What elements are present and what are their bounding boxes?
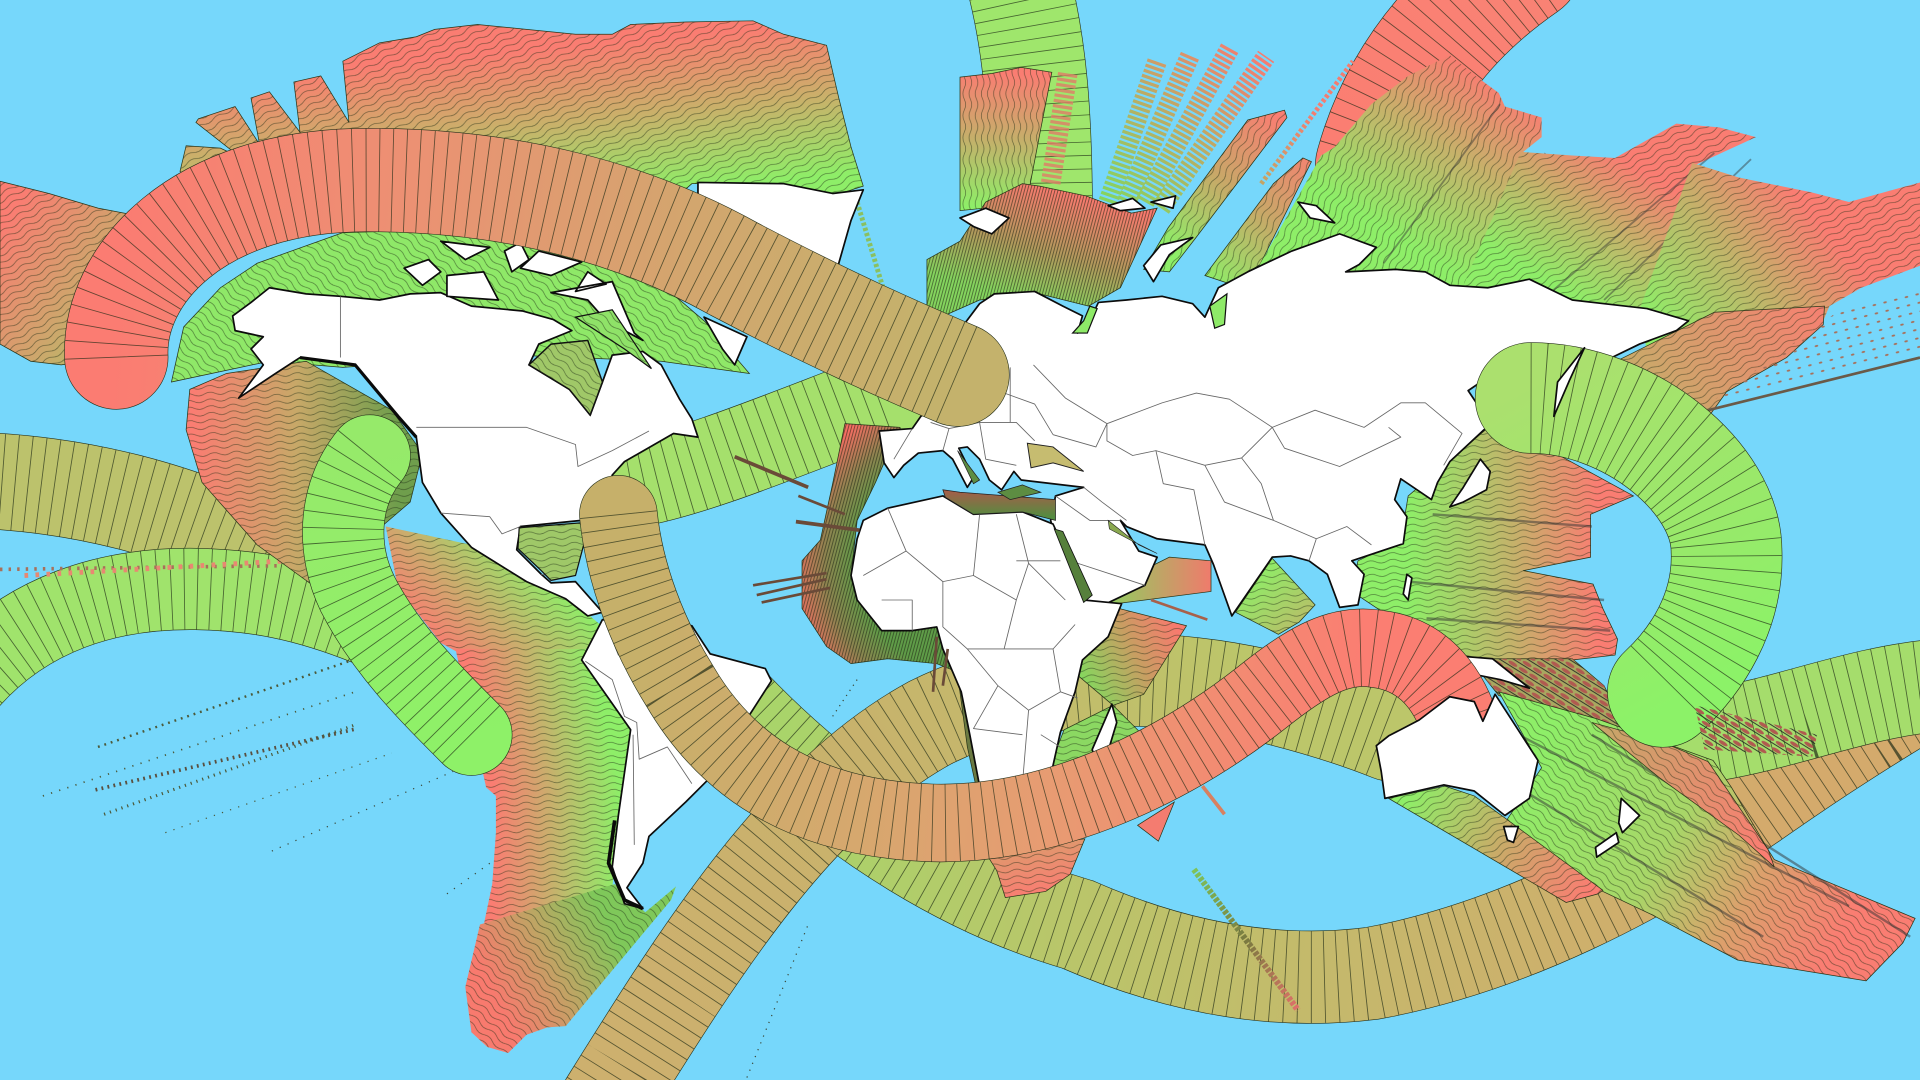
- fan: dark crescent around West Africa: [802, 424, 967, 676]
- water: Mediterranean dark strip: [943, 490, 1056, 520]
- strip: isolated arrow-like strand in the southern ocean: [1194, 869, 1298, 1010]
- land: Sakhalin: [1554, 348, 1584, 416]
- land: Madagascar: [1092, 704, 1117, 765]
- fan: Pacific extrusion off Chile: [480, 795, 624, 943]
- ribbon: green band from the top edge: [1020, 0, 1041, 227]
- fan: extrusion south of Australia: [1389, 786, 1603, 902]
- ribbon: green band at right edge: [1714, 686, 1920, 735]
- land: South America: [582, 620, 771, 909]
- borders: Africa: [863, 508, 1078, 784]
- land: Australia: [1376, 694, 1538, 816]
- scattered shoreline markers in the Pacific: [0, 561, 857, 1078]
- water: Black Sea: [1027, 443, 1084, 471]
- water: Persian Gulf strip: [1108, 520, 1157, 553]
- fan: long extrusion east of Australia: [1499, 692, 1915, 981]
- land: Japan: [1450, 459, 1490, 507]
- ribbon: green band across the south Pacific: [0, 589, 367, 686]
- fan: Kara Sea strip: [1144, 110, 1287, 272]
- fan: Laptev Sea strip: [1205, 158, 1311, 284]
- ribbon: tan band rising from the bottom edge behind Africa: [606, 680, 1390, 1080]
- fan: far-left red extrusion: [0, 181, 184, 365]
- fan: Arabian Sea: [1091, 557, 1211, 605]
- fan: Pacific extrusion off East Asia: [1352, 424, 1633, 671]
- fan: dark cluster off New Guinea: [1469, 659, 1631, 741]
- water: Hudson Bay: [529, 340, 602, 415]
- land: North America: [233, 288, 698, 616]
- fan: Pacific extrusion off Central America: [386, 527, 618, 655]
- fan: green coast band around northern Canada: [171, 230, 749, 382]
- fan: strip along southwest Africa: [959, 683, 987, 786]
- fan: Pacific extrusion off western North America: [186, 361, 422, 600]
- land: Eurasia: [879, 234, 1689, 616]
- fan: small red tip south of Madagascar: [1138, 802, 1174, 841]
- ribbon: green band over the north Atlantic: [631, 398, 882, 484]
- fan: Bay of Bengal and India: [1236, 558, 1315, 634]
- borders: South America: [585, 624, 692, 845]
- land: Sumatra, Borneo and New Guinea: [1403, 574, 1529, 688]
- coast: heavy black Alaska panhandle line: [300, 358, 416, 437]
- ribbon: bright green band off North America: [343, 456, 471, 735]
- ribbon: large orange band over North America and the Atlantic: [116, 180, 958, 375]
- fan: Pacific extrusion off Peru: [456, 649, 631, 796]
- fan: Barents Sea column: [927, 184, 1157, 323]
- fan: red patch south of Africa: [984, 839, 1085, 898]
- water: Red Sea dark strip: [1054, 529, 1092, 602]
- borders: Eurasia: [894, 365, 1462, 585]
- water: White Sea and Gulf of Ob: [1073, 294, 1227, 333]
- fan: central Siberian Arctic extrusion: [1237, 55, 1545, 306]
- fan: extrusion tail beneath Patagonia: [465, 884, 676, 1053]
- sticks: markers off West Africa: [735, 457, 1224, 814]
- ribbon: tan to red band from the Gulf coast to Australia: [618, 514, 1463, 823]
- water: Mediterranean north shore strips: [958, 451, 1041, 500]
- land: Svalbard and Arctic islands: [960, 196, 1335, 282]
- land: Canadian Arctic islands: [404, 241, 747, 365]
- fan: Norwegian Sea column: [960, 67, 1052, 211]
- fan: Somali coast: [1073, 609, 1187, 705]
- water: Foxe Basin and Hudson Strait: [576, 310, 651, 369]
- coast: heavy black Chilean fjord line: [609, 820, 643, 909]
- ribbon: long olive to tan band across the southern ocean: [732, 686, 1920, 977]
- fan: sparse dotted Arctic strands: [857, 47, 1353, 291]
- ribbon: red band from the top edge: [1374, 0, 1524, 165]
- land: Africa: [851, 496, 1122, 786]
- fan: red edge of the Coral Sea extrusion: [1592, 722, 1774, 867]
- fan: Mozambique channel: [1046, 705, 1144, 790]
- fan: East Siberian Sea extrusion: [1457, 124, 1756, 318]
- fan: Bering Sea extrusion: [1604, 306, 1824, 422]
- ribbon: large green band ending east of Australia: [1531, 398, 1727, 692]
- fan: dark cluster crossing the right green band: [1695, 705, 1817, 757]
- fan: Arctic extrusion above North America: [180, 21, 863, 233]
- ribbon: olive band entering from left edge: [0, 480, 318, 576]
- water: Gulf of Mexico: [518, 523, 585, 580]
- land: Tasmania and New Zealand: [1504, 798, 1640, 857]
- land: Greenland: [698, 182, 863, 300]
- scattered markers east of Kamchatka: [1708, 288, 1920, 410]
- fan: Chukchi Sea extrusion: [1641, 163, 1920, 355]
- borders: North America: [340, 296, 649, 578]
